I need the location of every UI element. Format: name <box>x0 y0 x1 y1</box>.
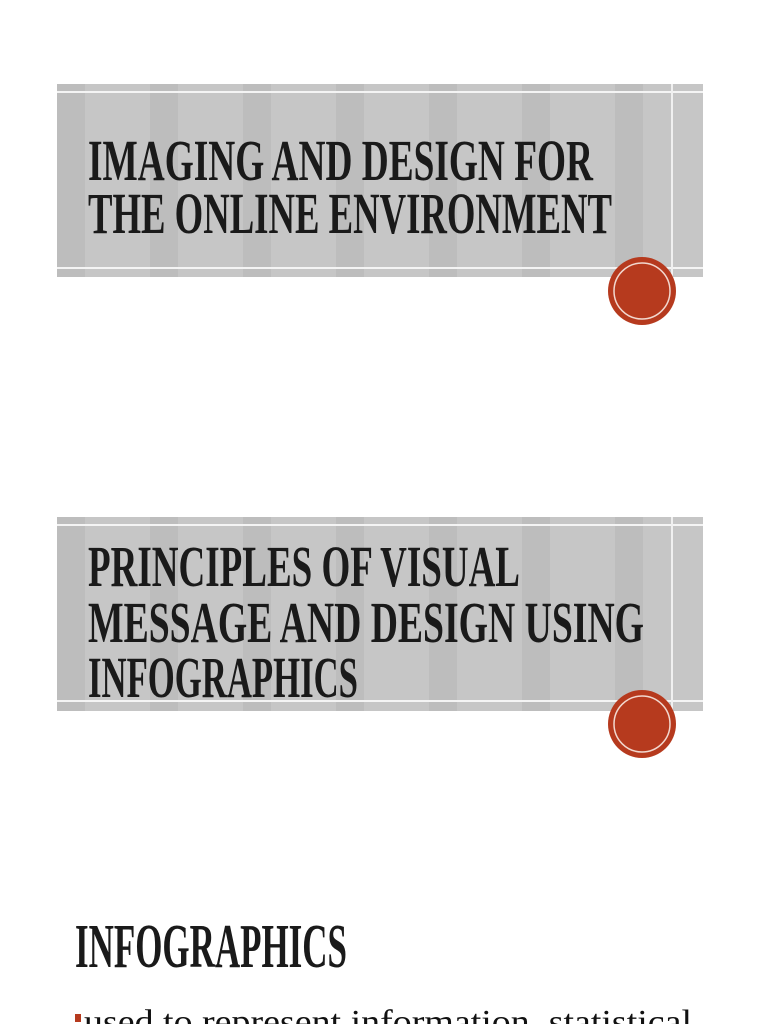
heading: principles: INFOGRAPHICS <box>88 645 358 710</box>
icon: red circle 2 <box>608 690 676 758</box>
panel: title 1 <box>57 84 703 277</box>
heading: principles: PRINCIPLES OF VISUAL <box>88 534 520 599</box>
panel: title 2 <box>57 517 703 711</box>
heading: imaging and design <box>88 128 612 246</box>
heading: principles <box>88 534 644 710</box>
icon: red circle 1 <box>608 257 676 325</box>
heading: infographics: INFOGRAPHICS <box>75 913 347 981</box>
